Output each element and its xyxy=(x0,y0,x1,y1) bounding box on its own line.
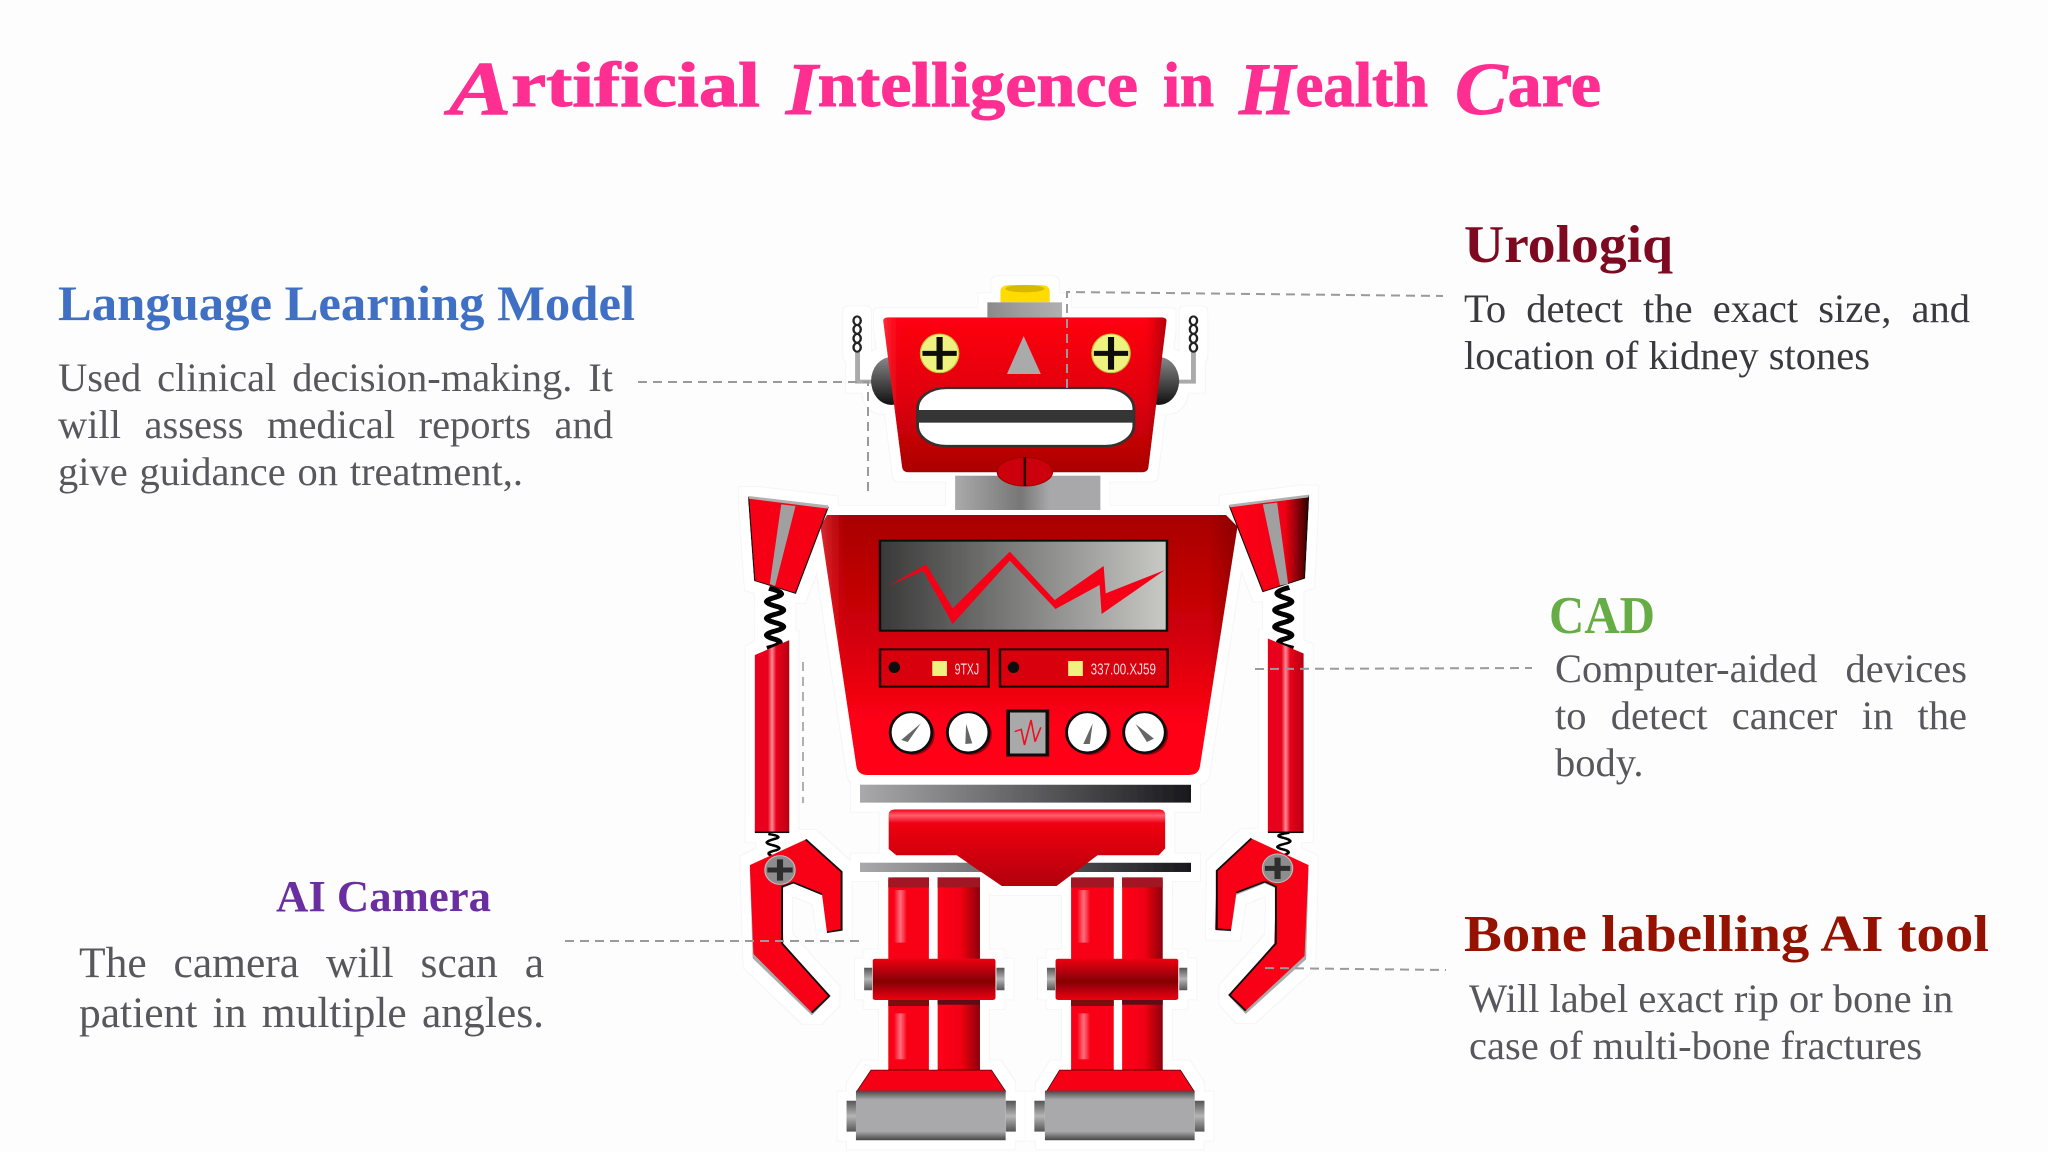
text block: bone labelling AI tool: case of multi-bone fractures xyxy=(1469,1023,1922,1068)
title: A xyxy=(444,47,511,131)
connector: AI camera vertical xyxy=(802,662,804,803)
icon: mouth xyxy=(918,388,1134,446)
text block: urologiq xyxy=(1464,286,1970,378)
heading: AI camera: AI Camera xyxy=(276,872,491,921)
right foot xyxy=(1034,1070,1204,1140)
right small spring xyxy=(1278,833,1290,857)
right claw xyxy=(1215,838,1309,1014)
connector: AI camera xyxy=(565,940,859,942)
panel: 337.00.XJ59: 337.00.XJ59 xyxy=(1091,660,1156,678)
robot illustration xyxy=(749,285,1309,1140)
icon: left bolt eye xyxy=(920,334,959,373)
panel: 9TXJ: 9TXJ xyxy=(955,660,979,678)
dial: second gauge xyxy=(947,712,992,755)
pelvis xyxy=(889,809,1165,886)
heading: CAD: CAD xyxy=(1549,587,1655,645)
connector: bone labelling xyxy=(1265,968,1446,970)
right knee xyxy=(1047,959,1187,1000)
panel: 9TXJ xyxy=(880,649,989,687)
left foot xyxy=(847,1070,1016,1140)
dial: first gauge xyxy=(890,712,935,755)
left arm rod xyxy=(755,640,789,832)
icon: chin xyxy=(997,457,1053,486)
connector: CAD xyxy=(1255,668,1532,669)
title: H xyxy=(1238,49,1298,131)
left knee xyxy=(864,959,1004,1000)
heading: language learning model: Language Learning Model xyxy=(58,275,635,331)
neck xyxy=(955,476,1100,510)
chart: small zigzag display xyxy=(1008,711,1047,755)
left leg xyxy=(888,877,980,1070)
panel: 337.00.XJ59 xyxy=(1000,649,1168,687)
right arm rod xyxy=(1268,638,1304,832)
head cap xyxy=(987,302,1062,317)
text block: CAD xyxy=(1555,646,1967,785)
text block: language learning model xyxy=(58,355,613,494)
text block: bone labelling AI tool xyxy=(1469,976,1953,1068)
text block: AI camera: The camera will scan a xyxy=(79,939,544,987)
right leg xyxy=(1071,877,1163,1070)
icon: ears xyxy=(871,357,1179,405)
left arm spring xyxy=(767,588,783,648)
right arm spring xyxy=(1275,587,1293,648)
text block: AI camera xyxy=(79,939,544,1037)
icon: left antenna xyxy=(853,316,872,382)
text block: CAD: Computer-aided devices xyxy=(1555,646,1967,691)
text block: CAD: to detect cancer in the xyxy=(1555,693,1967,738)
title xyxy=(444,47,1601,131)
title: I xyxy=(785,49,820,131)
text block: CAD: body. xyxy=(1555,740,1644,785)
title: ntelligence xyxy=(818,49,1138,120)
hip bar xyxy=(860,863,1191,872)
left claw xyxy=(750,839,842,1015)
title: C xyxy=(1455,49,1509,131)
icon: right antenna xyxy=(1176,316,1197,382)
dial: fourth gauge xyxy=(1124,712,1168,755)
text block: language learning model: give guidance on treatment,. xyxy=(58,449,523,494)
title: are xyxy=(1508,49,1601,120)
connector: language learning model xyxy=(638,382,868,493)
icon: left claw screw xyxy=(765,856,795,884)
heading: urologiq: Urologiq xyxy=(1464,216,1673,274)
left upper arm cuff xyxy=(749,496,828,593)
heading: bone labelling AI tool: Bone labelling AI tool xyxy=(1464,906,1989,963)
right upper arm cuff xyxy=(1229,495,1309,592)
title: rtificial xyxy=(511,49,760,120)
chart: screen with zigzag xyxy=(880,541,1167,631)
robot torso xyxy=(820,515,1238,775)
icon: triangle nose xyxy=(1007,336,1041,374)
text block: urologiq: location of kidney stones xyxy=(1464,333,1870,378)
waist bar xyxy=(860,785,1191,803)
dial: third gauge xyxy=(1067,712,1111,755)
connector: urologiq xyxy=(1067,292,1443,388)
text block: language learning model: will assess medical reports and xyxy=(58,402,613,447)
text block: bone labelling AI tool: Will label exact rip or bone in xyxy=(1469,976,1953,1021)
title: in xyxy=(1163,49,1214,120)
icon: right claw screw xyxy=(1262,854,1293,883)
robot head xyxy=(883,317,1167,472)
icon: right bolt eye xyxy=(1092,334,1130,373)
icon: yellow button xyxy=(1000,285,1050,302)
title: ealth xyxy=(1295,49,1428,120)
text block: language learning model: Used clinical decision-making. It xyxy=(58,355,613,400)
left small spring xyxy=(767,834,779,857)
text block: AI camera: patient in multiple angles. xyxy=(79,989,544,1037)
text block: urologiq: To detect the exact size, and xyxy=(1464,286,1970,331)
